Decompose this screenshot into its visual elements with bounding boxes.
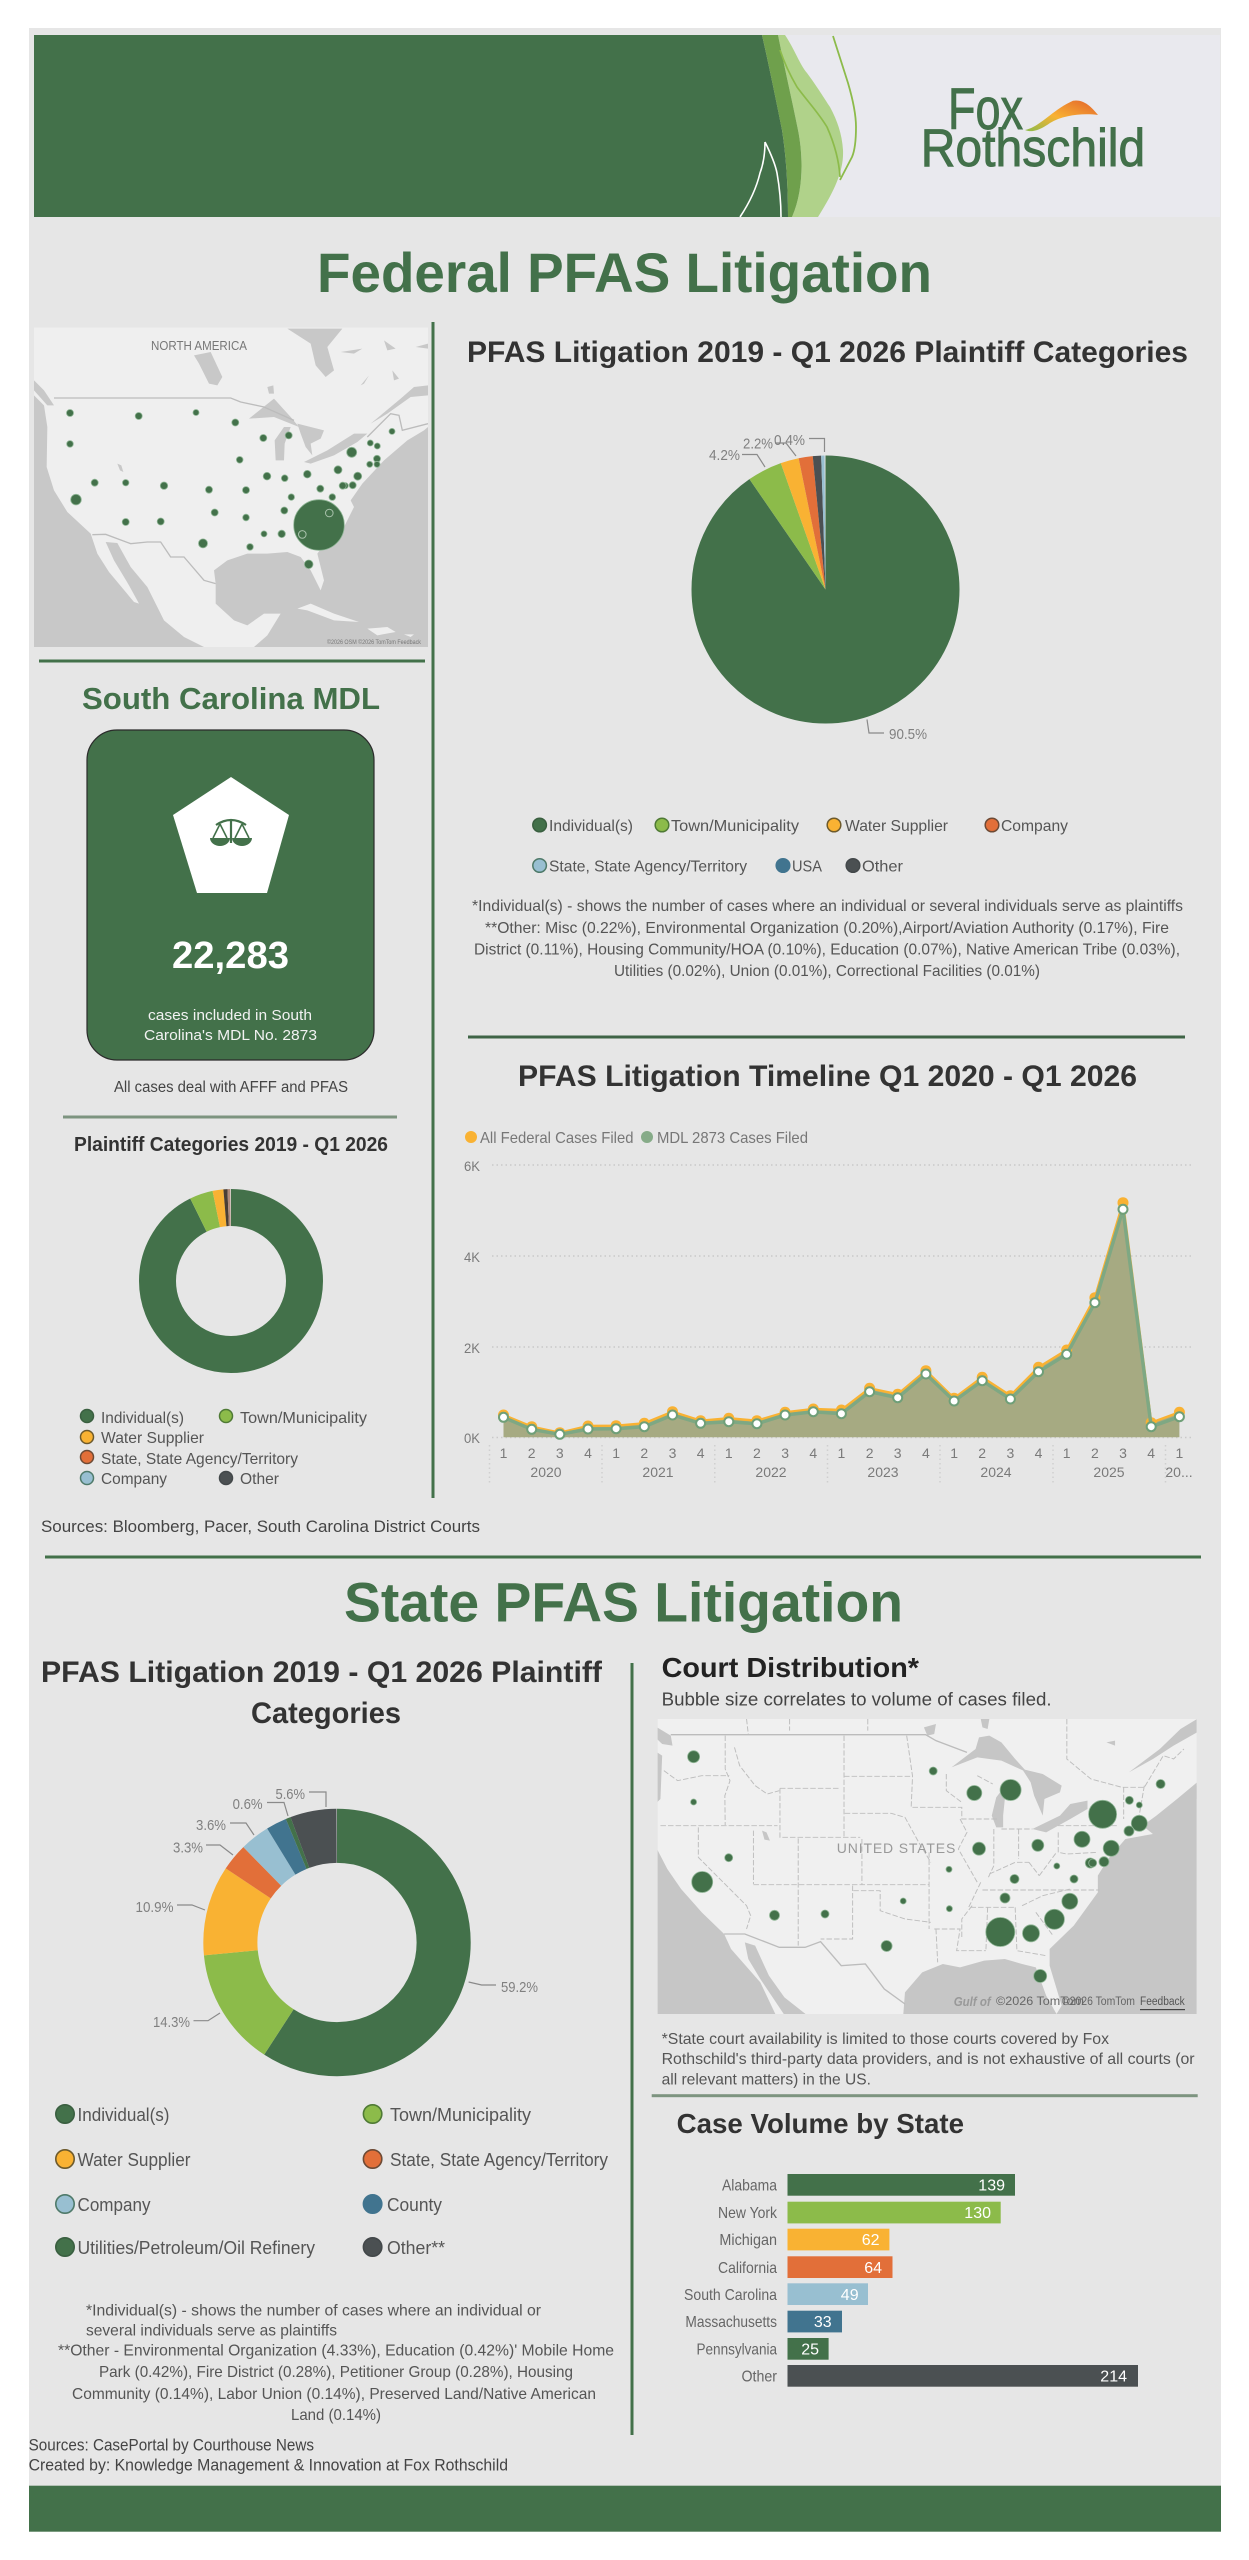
pie labels: 2.2% <box>743 436 773 452</box>
footnote: state court availability: *State court availability is limited to those courts covered by Fox <box>662 2031 1109 2048</box>
area chart: timeline: 20... <box>1165 1464 1193 1480</box>
legend: state plaintiff categories: Company <box>78 2195 150 2215</box>
footnote: federal plaintiff categories: **Other: Misc (0.22%), Environmental Organization (0.20%),Airport/Aviation Authority (0.17%), Fire <box>485 920 1169 937</box>
footnote: federal plaintiff categories: District (0.11%), Housing Community/HOA (0.10%), Education (0.07%), Native American Tribe (0.03%), <box>474 942 1180 958</box>
bar chart: case volume by state <box>684 2174 1138 2387</box>
bar chart: case volume by state: California <box>718 2260 777 2277</box>
area chart: timeline: 4K <box>464 1249 481 1265</box>
logo: Fox Rothschild: Rothschild <box>921 119 1145 178</box>
divider <box>652 2094 1198 2097</box>
legend: MDL plaintiff categories: Town/Municipality <box>240 1410 367 1427</box>
footnote: state court availability <box>662 2031 1195 2089</box>
footnote: federal plaintiff categories: *Individual(s) - shows the number of cases where an individual or several individuals serve as plaintiffs <box>472 898 1183 915</box>
area chart: timeline: 1 <box>500 1445 508 1461</box>
heading: Plaintiff Categories: Plaintiff Categories 2019 - Q1 2026 <box>74 1134 388 1156</box>
area chart: timeline: 4 <box>809 1445 817 1461</box>
legend: MDL plaintiff categories: Water Supplier <box>101 1430 205 1447</box>
area chart: timeline: 1 <box>950 1445 958 1461</box>
footnote: state court availability: Rothschild's third-party data providers, and is not exhaustive of all courts (or <box>662 2051 1195 2068</box>
area chart: timeline: 3 <box>1007 1445 1015 1461</box>
map: state court distribution: Feedback <box>1140 1996 1185 2008</box>
donut labels: 10.9% <box>136 1899 174 1916</box>
legend: state plaintiff categories: State, State Agency/Territory <box>390 2150 608 2170</box>
area chart: timeline: 3 <box>781 1445 789 1461</box>
legend: state plaintiff categories: County <box>387 2195 442 2215</box>
card caption: cases included in South <box>148 1007 312 1024</box>
map: state court distribution: ©2026 TomTom <box>996 1996 1084 2008</box>
footer bar <box>29 2486 1221 2532</box>
bar chart: case volume by state: Alabama <box>722 2178 777 2194</box>
bar chart: case volume by state: 130 <box>964 2205 991 2222</box>
divider <box>432 322 434 1498</box>
bar chart: case volume by state: 64 <box>864 2260 882 2277</box>
area chart: timeline: 1 <box>1176 1445 1184 1461</box>
area chart: timeline: 2 <box>978 1445 986 1461</box>
donut labels <box>136 1786 538 2031</box>
footnote: state plaintiff categories: several individuals serve as plaintiffs <box>86 2323 337 2340</box>
area chart: timeline: 2 <box>528 1445 536 1461</box>
heading: South Carolina MDL: South Carolina MDL <box>82 681 380 716</box>
map: federal case locations: ©2026 OSM ©2026 TomTom Feedback <box>327 639 422 646</box>
sources: state: Sources: CasePortal by Courthouse News <box>29 2437 314 2455</box>
area chart: timeline: 3 <box>556 1445 564 1461</box>
bar chart: case volume by state: 49 <box>841 2287 859 2304</box>
map: state court distribution: UNITED STATES <box>837 1840 955 1856</box>
divider <box>468 1036 1185 1038</box>
heading: state plaintiff categories <box>41 1656 603 1730</box>
legend: state plaintiff categories: Utilities/Petroleum/Oil Refinery <box>78 2238 315 2258</box>
pie labels: 4.2% <box>709 447 740 464</box>
bar chart: case volume by state: 25 <box>801 2342 819 2358</box>
pie chart: federal plaintiff categories <box>709 432 927 743</box>
heading: plaintiff categories pie: PFAS Litigation 2019 - Q1 2026 Plaintiff Categories <box>467 336 1188 369</box>
legend: MDL plaintiff categories <box>80 1410 367 1488</box>
donut chart: MDL plaintiff categories <box>158 1208 304 1354</box>
footnote: state plaintiff categories: **Other - Environmental Organization (4.33%), Education (0.42%)' Mobile Home <box>58 2343 614 2360</box>
legend: federal plaintiff categories: Company <box>1001 818 1068 835</box>
legend: federal plaintiff categories: Town/Municipality <box>671 818 799 835</box>
area chart: timeline: 6K <box>464 1158 481 1174</box>
map: state court distribution: Gulf of <box>954 1994 992 2009</box>
card caption <box>144 1007 317 1044</box>
area chart: timeline: 1 <box>838 1445 846 1461</box>
legend: state plaintiff categories: Town/Municipality <box>390 2105 531 2125</box>
footnote: state plaintiff categories: Park (0.42%), Fire District (0.28%), Petitioner Group (0.28%), Housing <box>99 2364 573 2381</box>
footnote: federal plaintiff categories <box>472 898 1183 980</box>
map: state court distribution <box>657 1719 1197 2015</box>
divider <box>63 1116 397 1118</box>
icon: scales of justice <box>173 777 289 893</box>
legend: MDL plaintiff categories: Individual(s) <box>101 1410 184 1427</box>
bar chart: case volume by state: 214 <box>1100 2368 1127 2386</box>
sources: state: Created by: Knowledge Management & Innovation at Fox Rothschild <box>29 2457 508 2475</box>
sources: state <box>29 2437 508 2475</box>
card caption: Carolina's MDL No. 2873 <box>144 1027 317 1044</box>
legend: federal plaintiff categories: Other <box>862 858 904 876</box>
area chart: timeline: 4 <box>1035 1445 1043 1461</box>
legend: federal plaintiff categories: Individual(s) <box>549 818 633 835</box>
area chart: timeline: 4 <box>922 1445 930 1461</box>
heading: Court Distribution: Court Distribution* <box>662 1652 919 1683</box>
bar chart: case volume by state: South Carolina <box>684 2287 777 2304</box>
area chart: timeline: 2020 <box>530 1464 562 1480</box>
title: State PFAS Litigation: State PFAS Litigation <box>344 1570 903 1634</box>
area chart: timeline: 1 <box>1063 1445 1071 1461</box>
footnote: state plaintiff categories: Community (0.14%), Labor Union (0.14%), Preserved Land/Native American <box>72 2386 596 2403</box>
bar chart: case volume by state: 139 <box>978 2178 1005 2194</box>
logo: Fox Rothschild <box>921 77 1145 178</box>
area chart: timeline: 2024 <box>980 1464 1012 1480</box>
pie labels: 90.5% <box>889 726 927 743</box>
subtitle: bubble size: Bubble size correlates to volume of cases filed. <box>662 1690 1052 1710</box>
area chart: timeline: 2025 <box>1093 1464 1125 1480</box>
bar chart: case volume by state: Other <box>742 2368 778 2386</box>
donut chart: state plaintiff categories <box>136 1786 538 2049</box>
sources: federal: Sources: Bloomberg, Pacer, South Carolina District Courts <box>41 1518 480 1536</box>
heading: timeline: PFAS Litigation Timeline Q1 2020 - Q1 2026 <box>518 1060 1137 1093</box>
area chart: timeline: 2023 <box>867 1464 899 1480</box>
divider <box>630 1663 634 2435</box>
pie labels <box>709 432 927 743</box>
area chart: timeline: 2 <box>753 1445 761 1461</box>
legend: state plaintiff categories: Other** <box>387 2238 445 2258</box>
heading: state plaintiff categories: PFAS Litigation 2019 - Q1 2026 Plaintiff <box>41 1656 603 1689</box>
area chart: timeline: 4 <box>697 1445 705 1461</box>
bar chart: case volume by state: New York <box>718 2205 778 2222</box>
divider <box>39 660 425 662</box>
footnote: state plaintiff categories: Land (0.14%) <box>291 2407 381 2424</box>
header banner <box>34 35 1220 217</box>
legend: federal plaintiff categories <box>533 818 1068 876</box>
legend: timeline <box>465 1130 808 1147</box>
legend: state plaintiff categories <box>56 2105 608 2258</box>
area chart: timeline: 1 <box>612 1445 620 1461</box>
area chart: timeline: 2022 <box>755 1464 787 1480</box>
bar chart: case volume by state: Michigan <box>719 2232 777 2249</box>
footnote: federal plaintiff categories: Utilities (0.02%), Union (0.01%), Correctional Facilities (0.01%) <box>614 963 1040 980</box>
area chart: timeline: 4 <box>1147 1445 1155 1461</box>
donut labels: 0.6% <box>233 1796 263 1813</box>
donut labels: 3.6% <box>196 1817 226 1834</box>
map: federal case locations <box>34 328 428 647</box>
donut labels: 3.3% <box>173 1840 203 1856</box>
footnote: state plaintiff categories: *Individual(s) - shows the number of cases where an individual or <box>86 2303 542 2320</box>
bar chart: case volume by state: Massachusetts <box>685 2314 777 2331</box>
legend: MDL plaintiff categories: State, State Agency/Territory <box>101 1451 298 1468</box>
legend: state plaintiff categories: Water Supplier <box>78 2150 190 2170</box>
divider <box>45 1556 1201 1558</box>
legend: MDL plaintiff categories: Other <box>240 1471 280 1488</box>
legend: federal plaintiff categories: Water Supplier <box>845 818 949 835</box>
footnote: state court availability: all relevant matters) in the US. <box>662 2072 871 2089</box>
card: MDL case count <box>87 730 374 1060</box>
legend: federal plaintiff categories: State, State Agency/Territory <box>549 858 747 876</box>
area chart: timeline: 2 <box>866 1445 874 1461</box>
area chart: timeline: 2 <box>1091 1445 1099 1461</box>
area chart: timeline: 2K <box>464 1340 481 1356</box>
legend: state plaintiff categories: Individual(s) <box>78 2105 170 2125</box>
heading: Case Volume by State: Case Volume by State <box>677 2108 964 2139</box>
area chart: timeline: 0K <box>464 1430 481 1446</box>
heading: state plaintiff categories: Categories <box>251 1697 401 1730</box>
donut labels: 59.2% <box>501 1979 538 1996</box>
area chart: timeline: 3 <box>894 1445 902 1461</box>
note: AFFF and PFAS: All cases deal with AFFF and PFAS <box>114 1079 348 1096</box>
legend: timeline: All Federal Cases Filed <box>480 1130 634 1147</box>
court bubbles <box>688 1751 1165 1982</box>
map: federal case locations: NORTH AMERICA <box>151 338 247 353</box>
pie labels: 0.4% <box>774 432 805 449</box>
map: state court distribution: ©2026 TomTom <box>1062 1996 1135 2008</box>
area chart: timeline: 2 <box>640 1445 648 1461</box>
area chart: timeline: 4 <box>584 1445 592 1461</box>
area chart: timeline: 3 <box>669 1445 677 1461</box>
area chart: timeline <box>464 1158 1193 1483</box>
area chart: timeline: 3 <box>1119 1445 1127 1461</box>
bar chart: case volume by state: 33 <box>814 2314 832 2331</box>
donut labels: 14.3% <box>153 2014 190 2031</box>
legend: timeline: MDL 2873 Cases Filed <box>657 1130 808 1147</box>
donut labels: 5.6% <box>276 1786 305 1803</box>
bar chart: case volume by state: 62 <box>862 2232 880 2249</box>
area chart: timeline: 1 <box>725 1445 733 1461</box>
title: Federal PFAS Litigation: Federal PFAS Litigation <box>317 241 932 304</box>
footnote: state plaintiff categories <box>58 2303 614 2424</box>
area chart: timeline: 2021 <box>642 1464 674 1480</box>
stat: 22,283: 22,283 <box>172 935 289 977</box>
logo: Fox Rothschild: Fox <box>948 77 1023 142</box>
case bubbles <box>66 410 395 569</box>
bar chart: case volume by state: Pennsylvania <box>696 2342 777 2358</box>
legend: MDL plaintiff categories: Company <box>101 1471 167 1488</box>
legend: federal plaintiff categories: USA <box>792 858 822 876</box>
